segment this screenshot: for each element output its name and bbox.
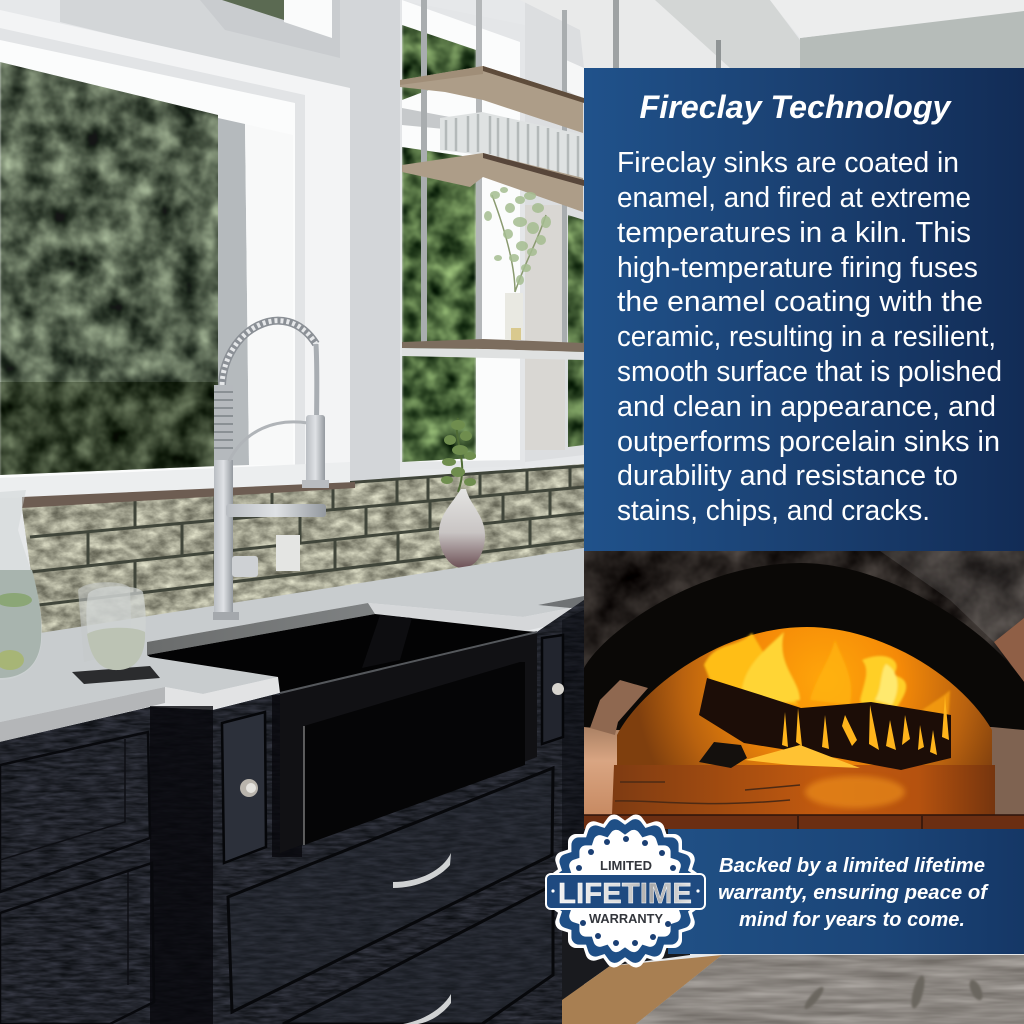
warranty text: mind for years to come. [739,909,965,931]
water pitcher [0,490,42,680]
middle shelf [402,153,583,212]
hearth lip [584,815,1024,829]
lower drawer [283,885,553,1024]
bud vase with plant [439,418,485,568]
body text: outperforms porcelain sinks in [617,426,1000,458]
body text: temperatures in a kiln. This [617,217,971,249]
brick backsplash [20,460,586,640]
body text: and clean in appearance, and [617,391,996,423]
shelf plant in vase [484,187,551,340]
window sill [0,462,355,508]
hearth floor [612,765,995,815]
kiln fire photo [584,551,1024,829]
back sink edge [147,603,375,655]
limited label: LIMITED [600,858,652,873]
small log [699,742,747,768]
top shelf [400,66,583,133]
brick jambs [584,725,620,815]
lower shelf [402,339,584,352]
body text: ceramic, resulting in a resilient, [617,321,996,353]
warranty text: Backed by a limited lifetime [719,855,985,877]
right window [400,0,584,470]
cabinets [0,600,584,1024]
ceiling and beams [520,0,1024,68]
foliage through large window [0,60,220,480]
countertop [0,548,584,742]
body text: stains, chips, and cracks. [617,495,930,527]
warranty label: WARRANTY [589,911,663,926]
body text: Fireclay sinks are coated in [617,147,959,179]
warranty text: warranty, ensuring peace of [718,882,989,904]
body text: durability and resistance to [617,460,958,492]
body text [617,147,1002,527]
flames [704,632,950,725]
badge: limited lifetime warranty [545,811,705,971]
upper drawer [228,768,553,1012]
upper window [200,0,340,58]
body text: the enamel coating with the [617,286,983,318]
panel: fireclay technology text [584,68,1024,551]
farmhouse sink [147,614,537,853]
soot-free brick patch [590,680,648,735]
flames licking log [745,695,949,768]
glassware [440,112,584,178]
right counter edge [368,603,570,631]
body text: high-temperature firing fuses [617,252,978,284]
main log [699,678,951,770]
heading: Fireclay Technology [640,89,953,125]
body text: smooth surface that is polished [617,356,1002,388]
rug [630,950,1024,1024]
large window frame [0,10,350,498]
wall outlet [276,535,300,571]
lifetime ribbon: LIFETIME [558,878,692,910]
open shelves with glasses [400,0,721,360]
narrow door with knob [222,712,266,863]
faucet [213,321,329,620]
drinking glasses on coaster [72,582,160,684]
warranty text [718,855,989,931]
left counter edge [0,687,165,742]
wood floor [562,829,722,1024]
right narrow door with knob [542,635,564,744]
firebox interior [617,627,992,770]
left cabinet doors [0,732,154,1024]
soot arch [584,563,1024,730]
window reflection panel [218,118,249,466]
warranty band [668,829,1024,954]
body text: enamel, and fired at extreme [617,182,971,214]
dots [576,836,676,946]
